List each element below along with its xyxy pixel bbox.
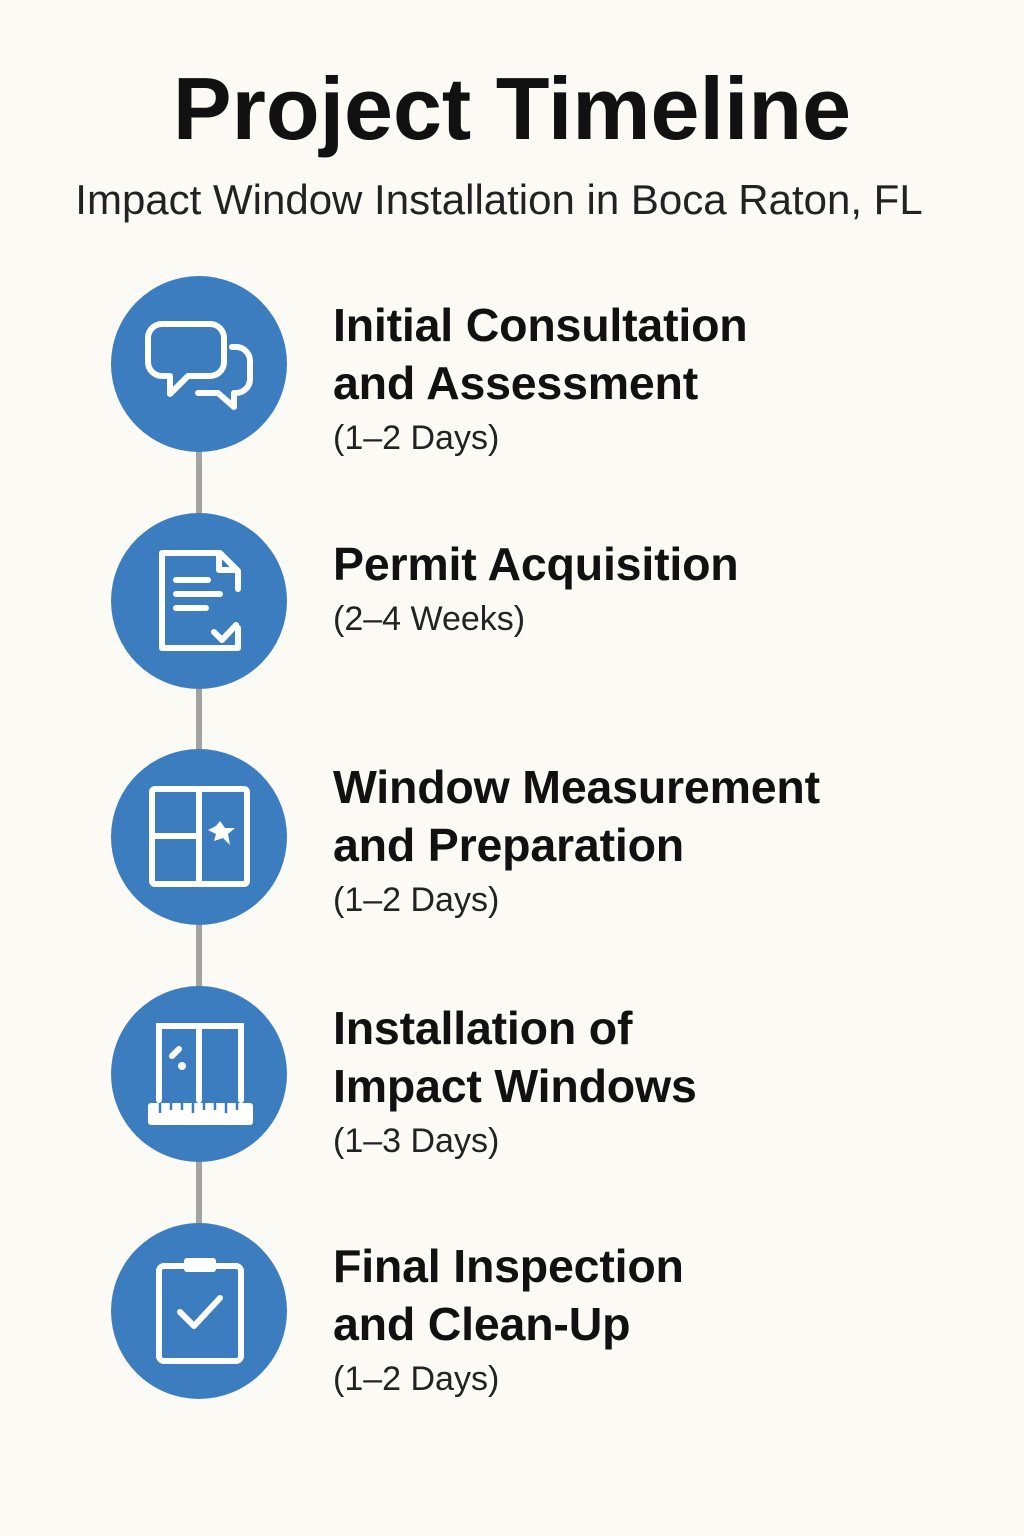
step 5 text: and Clean-Up [333,1298,630,1350]
step 4 text: Impact Windows [333,1060,697,1112]
step 1 text: (1–2 Days) [333,419,499,457]
icon: permit document [111,513,287,689]
step 2 text: (2–4 Weeks) [333,600,525,638]
step 4 text: Installation of [333,1002,632,1054]
step 2 text: Permit Acquisition [333,538,738,590]
step 3 text: Window Measurement [333,761,820,813]
step 1 text [333,299,747,457]
step 2 text [333,538,738,638]
step 3 text: (1–2 Days) [333,881,499,919]
step 1 text: Initial Consultation [333,299,747,351]
icon: chat bubbles [111,276,287,452]
subtitle: Impact Window Installation in Boca Raton, FL [75,176,923,223]
icon: clipboard check [111,1223,287,1399]
step 5 text: (1–2 Days) [333,1360,499,1398]
step 3 text: and Preparation [333,819,684,871]
step 4 text [333,1002,697,1160]
step 4 text: (1–3 Days) [333,1122,499,1160]
step 3 text [333,761,820,919]
title: Project Timeline [173,59,851,158]
icon: window installation with ruler [111,986,287,1162]
step 1 text: and Assessment [333,357,698,409]
step 5 text [333,1240,684,1398]
icon: window with crack [111,749,287,925]
step 5 text: Final Inspection [333,1240,684,1292]
